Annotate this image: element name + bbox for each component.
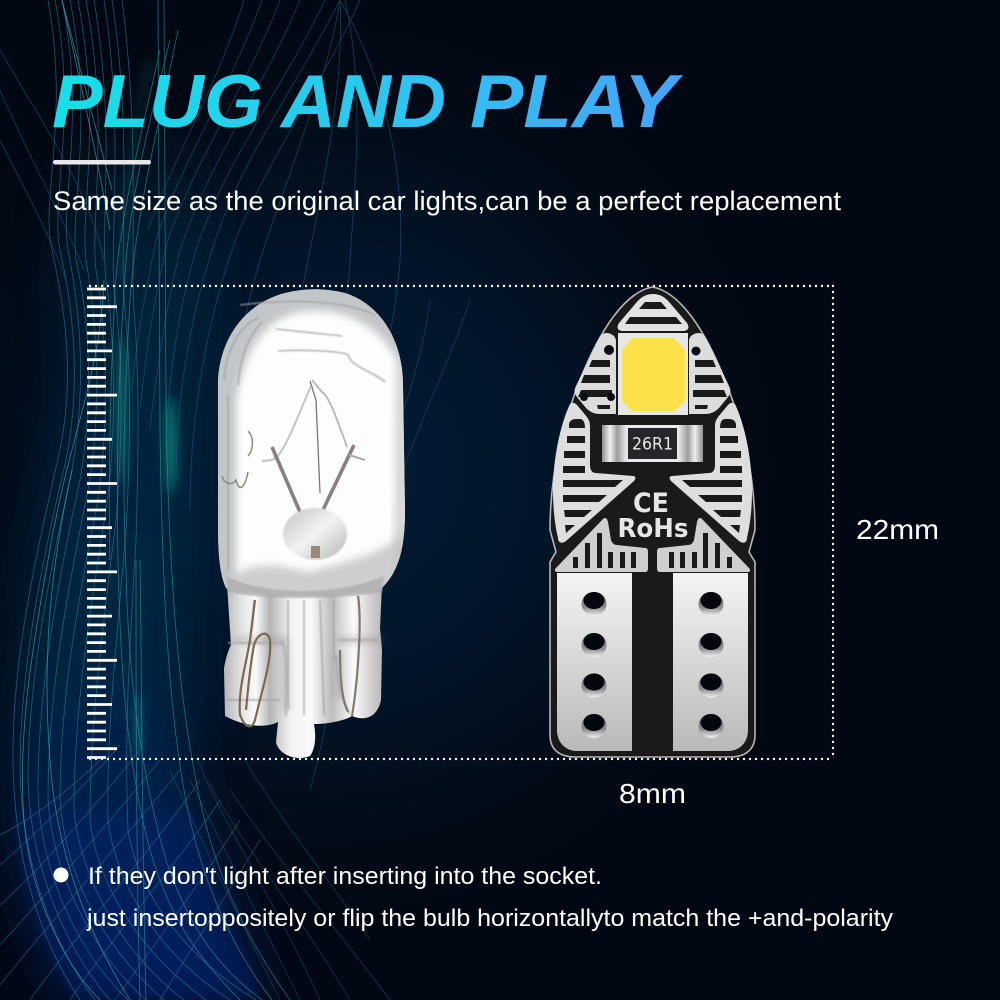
width label: 8mm — [619, 778, 686, 809]
height label: 22mm — [856, 514, 939, 545]
bulb glass envelope — [218, 289, 405, 596]
LED chip — [618, 333, 688, 415]
board body — [550, 287, 755, 757]
resistor: 26R1 — [632, 434, 673, 454]
title: PLAY — [470, 59, 684, 143]
filament wires — [262, 380, 365, 512]
note line 1: If they don't light after inserting into the socket. — [88, 863, 602, 890]
bead core — [311, 546, 320, 558]
bullet point — [54, 868, 68, 882]
title: AND — [279, 59, 446, 143]
RoHs mark: RoHs — [618, 514, 688, 544]
glass bulb — [210, 280, 410, 758]
glass stem bead — [283, 508, 347, 560]
bulb base — [224, 585, 382, 758]
copper lead loop — [240, 596, 360, 726]
printed mark — [222, 431, 252, 487]
circuit board — [550, 287, 755, 757]
left board pattern — [553, 333, 648, 751]
glass highlights — [224, 301, 385, 570]
top vent triangle — [618, 294, 688, 331]
base collar — [226, 576, 384, 598]
background wave glow band — [14, 60, 265, 1000]
title — [52, 59, 684, 143]
CE mark: CE — [633, 488, 669, 519]
background wave lines — [0, 0, 470, 1000]
ruler — [87, 289, 117, 758]
dotted dimension lines — [90, 286, 833, 759]
title: PLUG — [52, 59, 263, 143]
resistor — [602, 425, 703, 462]
subtitle: Same size as the original car lights,can be a perfect replacement — [53, 186, 842, 216]
right board pattern — [657, 333, 752, 751]
note line 2: just insertoppositely or flip the bulb horizontallyto match the +and-polarity — [86, 905, 893, 932]
title underline — [53, 160, 151, 164]
